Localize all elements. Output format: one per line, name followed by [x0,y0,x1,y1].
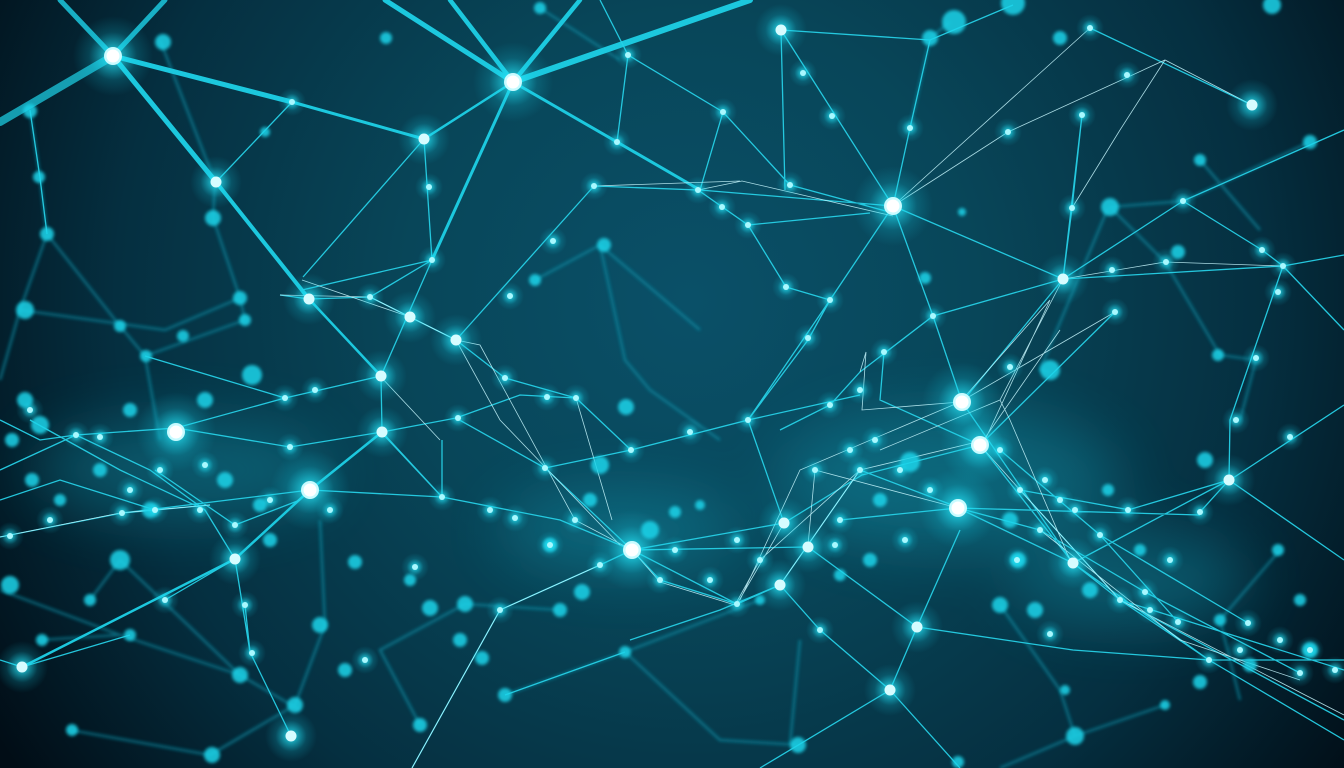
thick foreground lines [0,0,750,667]
central glow clusters [30,410,1250,625]
